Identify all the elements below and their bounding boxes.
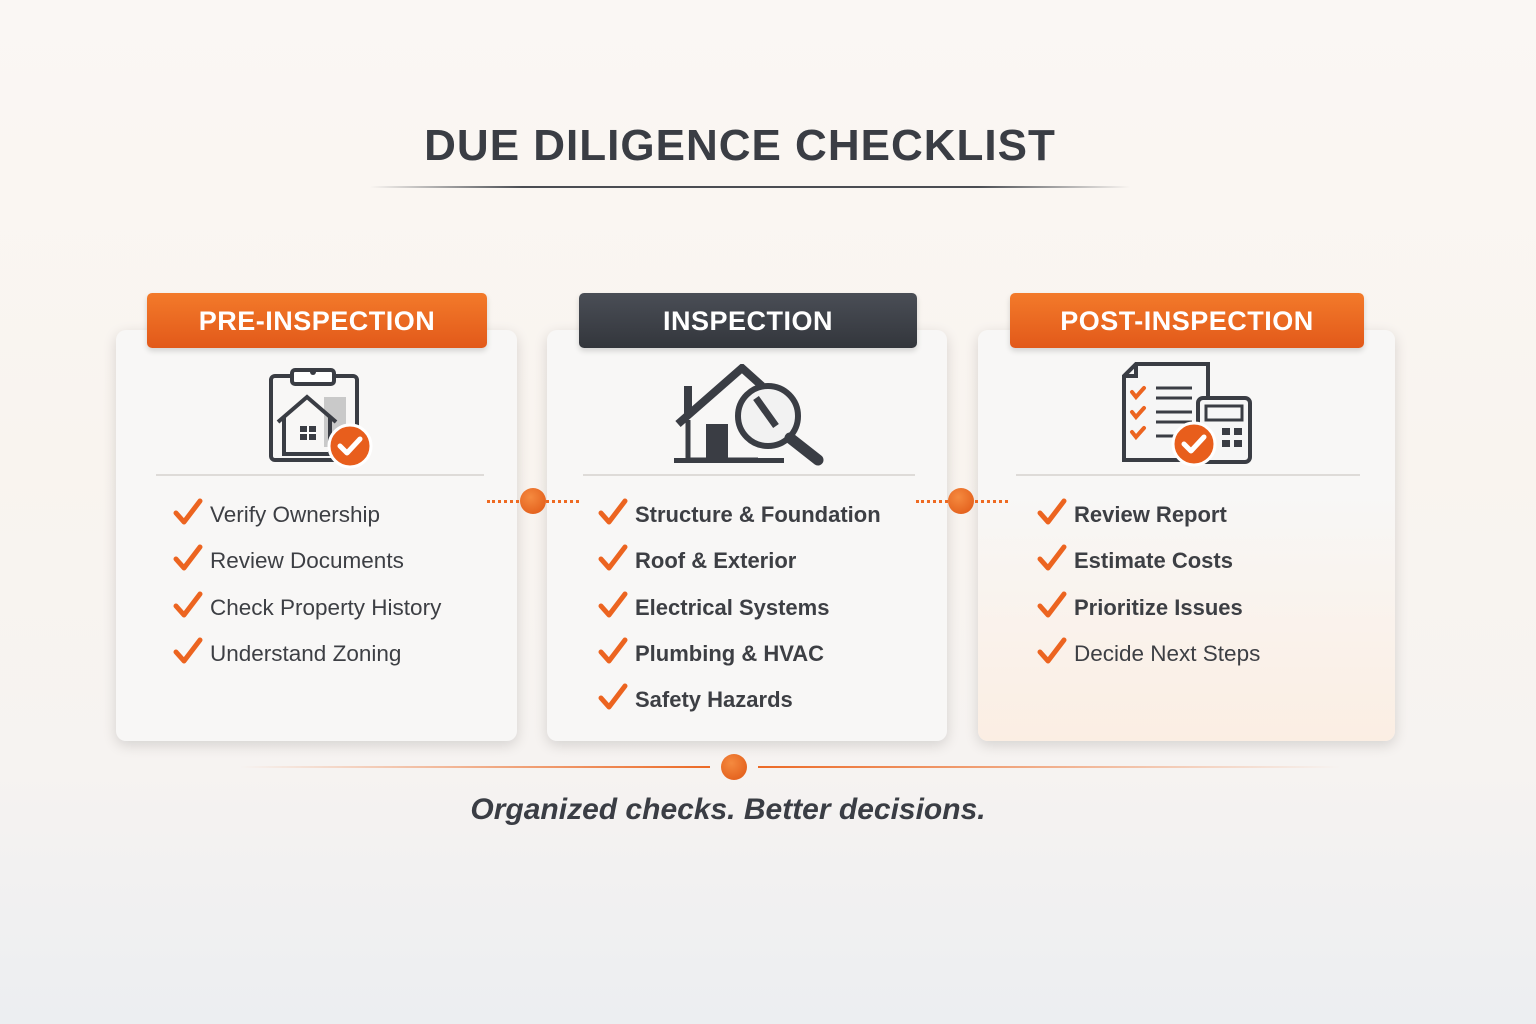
list: pre-inspection items: Review Documents <box>210 548 404 573</box>
list: post-inspection items: Decide Next Steps <box>1074 641 1260 666</box>
heading: post-inspection: POST-INSPECTION <box>1060 306 1314 336</box>
list: post-inspection items: Prioritize Issues <box>1074 595 1243 620</box>
connector 2 <box>916 488 1008 514</box>
list: pre-inspection items <box>174 498 442 666</box>
list: post-inspection items <box>1038 498 1260 666</box>
list: inspection items <box>598 498 881 712</box>
title: DUE DILIGENCE CHECKLIST <box>424 121 1056 170</box>
list: inspection items: Structure & Foundation <box>635 502 881 527</box>
heading: post-inspection <box>1010 293 1364 348</box>
list: pre-inspection items: Check Property History <box>210 595 441 620</box>
icon: house magnifier <box>674 364 824 466</box>
list: inspection items: Safety Hazards <box>635 687 793 712</box>
heading: inspection <box>579 293 917 348</box>
panel: pre-inspection <box>116 330 517 741</box>
list: inspection items: Roof & Exterior <box>635 548 796 573</box>
list: inspection items: Electrical Systems <box>635 595 829 620</box>
icon: clipboard house <box>269 368 372 468</box>
heading: pre-inspection <box>147 293 487 348</box>
panel: inspection <box>547 330 947 741</box>
icon: report calculator <box>1122 362 1252 466</box>
tagline: Organized checks. Better decisions. <box>470 793 986 826</box>
heading: pre-inspection: PRE-INSPECTION <box>199 306 435 336</box>
title underline <box>370 186 1130 188</box>
list: pre-inspection items: Verify Ownership <box>210 502 380 527</box>
list: post-inspection items: Review Report <box>1074 502 1227 527</box>
list: post-inspection items: Estimate Costs <box>1074 548 1233 573</box>
connector 1 <box>487 488 579 514</box>
heading: inspection: INSPECTION <box>663 306 833 336</box>
list: pre-inspection items: Understand Zoning <box>210 641 401 666</box>
panel: post-inspection <box>978 330 1395 741</box>
list: inspection items: Plumbing & HVAC <box>635 641 824 666</box>
bottom timeline <box>259 754 1316 780</box>
